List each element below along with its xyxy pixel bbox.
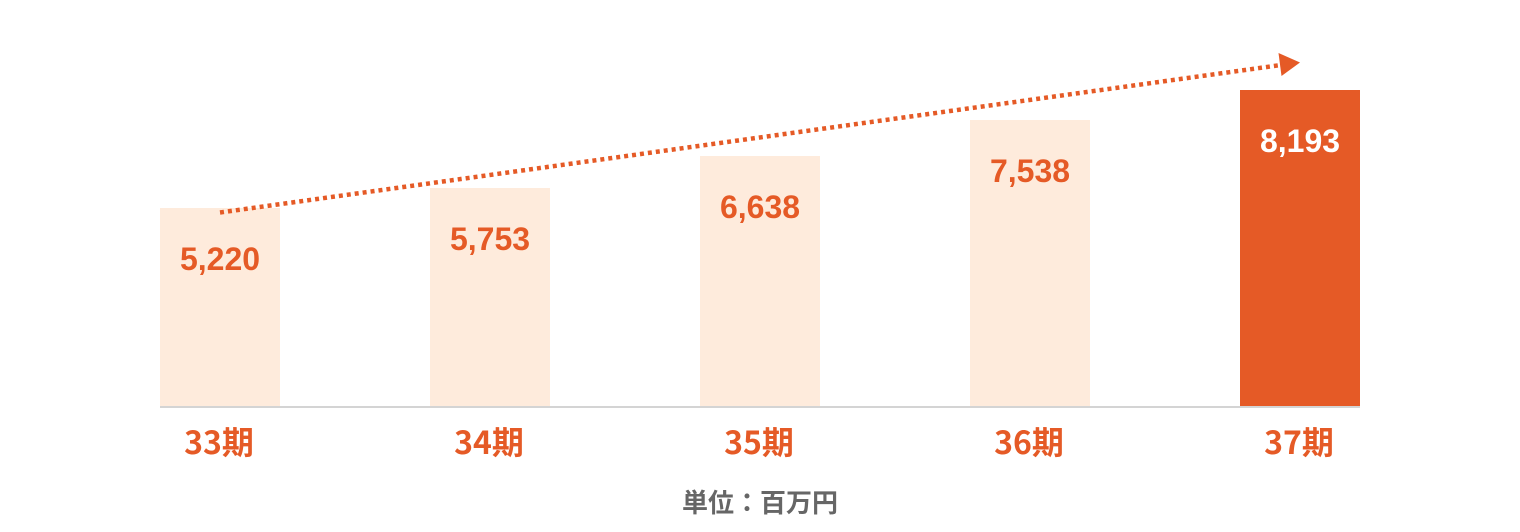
bar: 37期 highlighted: 8,193: [1260, 123, 1340, 159]
axis labels: 34期: [454, 418, 524, 464]
axis labels: 35期: [724, 418, 794, 464]
bar: 34期: 5,753: [450, 221, 530, 257]
arrow: dotted growth trend: [220, 53, 1300, 212]
axis labels: 33期: [184, 418, 254, 464]
axis labels: 37期: [1264, 418, 1334, 464]
axis labels: [184, 418, 1334, 464]
bar: 36期: [970, 120, 1090, 406]
bar: 33期: [160, 208, 280, 406]
bar: 35期: 6,638: [720, 189, 800, 225]
axis line: [160, 406, 1360, 408]
bar: 36期: 7,538: [990, 153, 1070, 189]
axis labels: 36期: [994, 418, 1064, 464]
bar: 37期 highlighted: [1240, 90, 1360, 406]
bar: 33期: 5,220: [180, 241, 260, 277]
bar: 34期: [430, 188, 550, 406]
bar: 35期: [700, 156, 820, 406]
unit note: 単位：百万円: [682, 483, 838, 520]
